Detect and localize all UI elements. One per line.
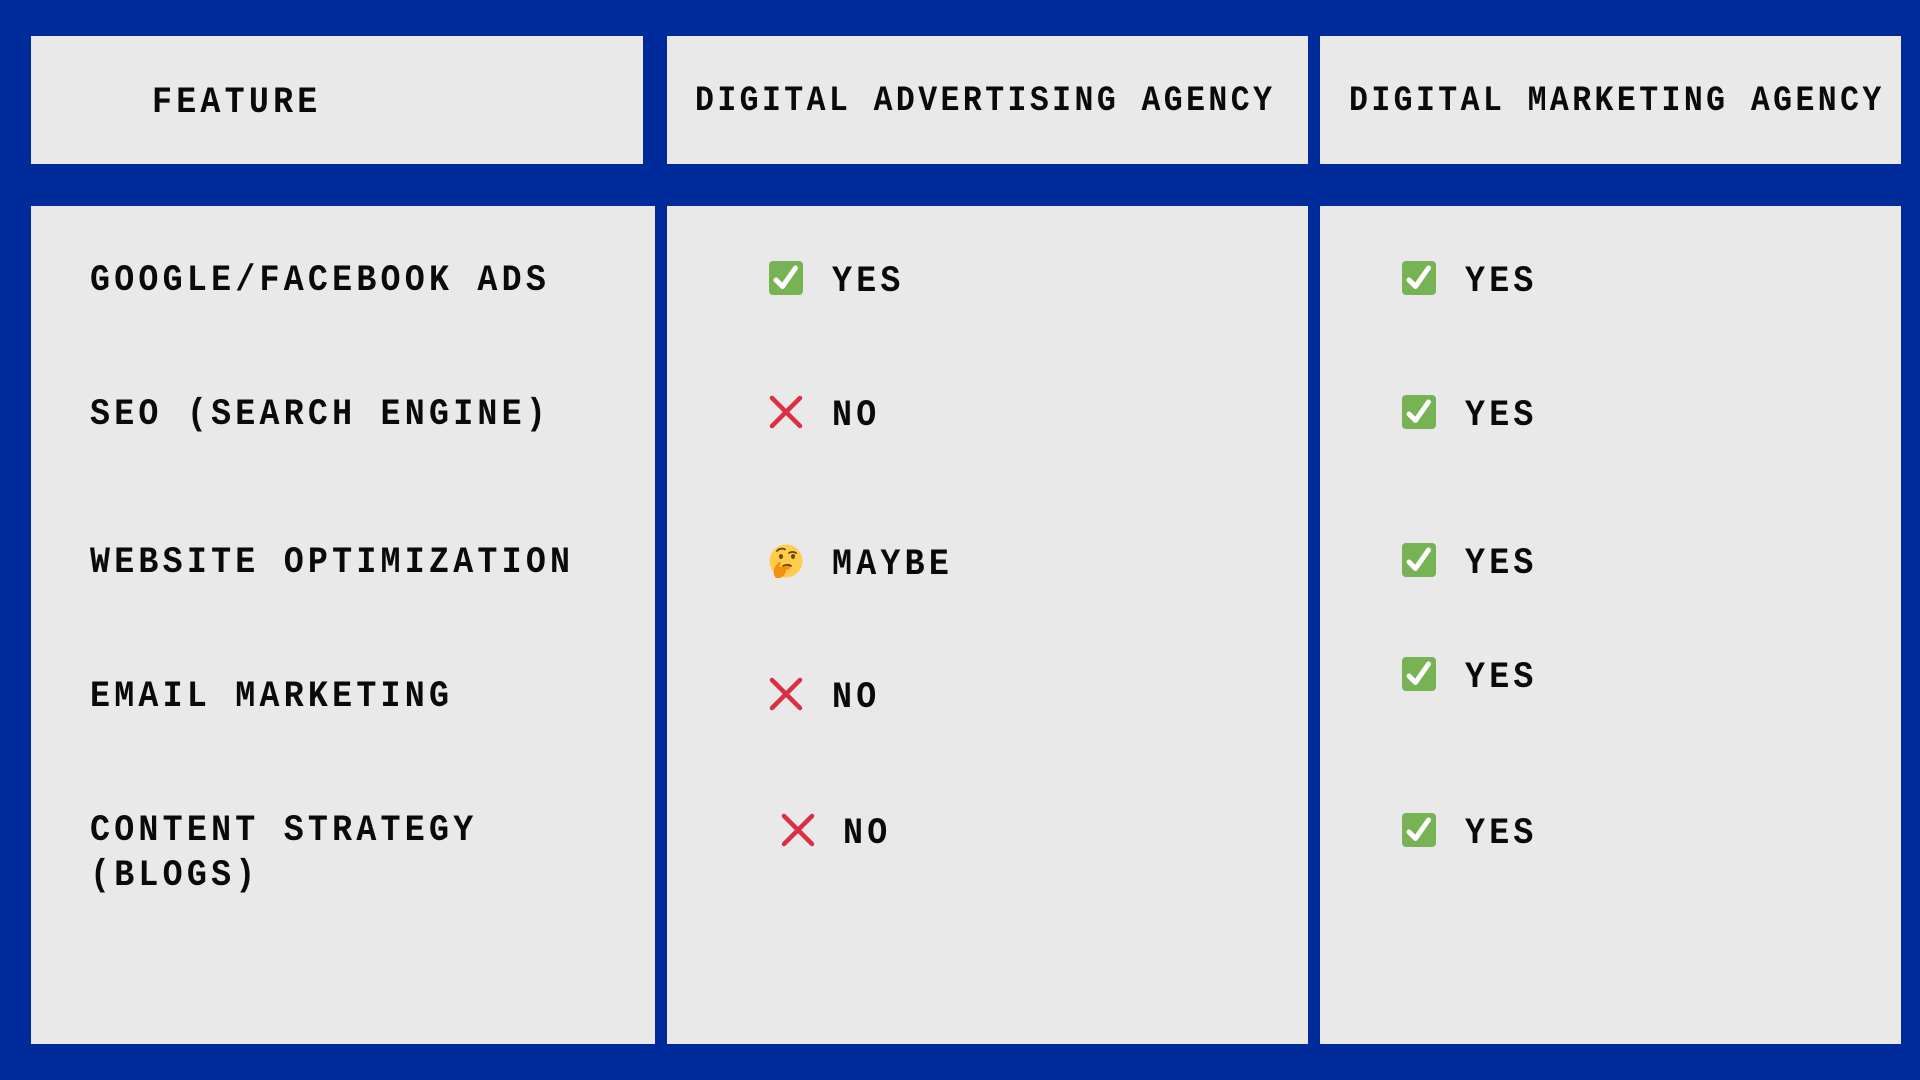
icon: thinking face (770, 544, 802, 578)
icon: green check (1402, 813, 1436, 847)
label: no: NO (832, 394, 880, 436)
row: email marketing no (770, 676, 880, 718)
label: yes: YES (1464, 260, 1537, 302)
label: no: NO (842, 812, 891, 854)
heading: feature: FEATURE (152, 82, 321, 124)
icon: green check (1402, 261, 1436, 295)
row: google/facebook ads yes (1402, 260, 1537, 302)
row: seo yes (1402, 394, 1537, 436)
icon: green check (1402, 543, 1436, 577)
label: yes: YES (1464, 394, 1537, 436)
icon: red cross (770, 678, 802, 710)
heading: digital marketing agency: DIGITAL MARKETING AGENCY (1349, 81, 1885, 121)
header panel: feature (31, 36, 643, 164)
header panel: digital marketing agency (1320, 36, 1901, 164)
feature: website optimization: WEBSITE OPTIMIZATION (90, 542, 574, 584)
feature: email marketing: EMAIL MARKETING (90, 676, 453, 718)
label: no: NO (832, 676, 880, 718)
row: google/facebook ads yes (769, 260, 904, 302)
heading: digital advertising agency: DIGITAL ADVERTISING AGENCY (695, 81, 1275, 121)
row: website optimization maybe (770, 544, 953, 586)
label: maybe: MAYBE (832, 544, 953, 586)
row: content strategy yes (1402, 812, 1537, 854)
icon: green check (769, 261, 803, 295)
feature: content strategy: CONTENT STRATEGY (BLOGS) (90, 810, 477, 896)
label: yes: YES (1464, 542, 1537, 584)
feature: google/facebook ads: GOOGLE/FACEBOOK ADS (90, 260, 550, 302)
label: yes: YES (1464, 812, 1537, 854)
feature: seo: SEO (SEARCH ENGINE) (90, 394, 550, 436)
label: yes: YES (832, 260, 904, 302)
panel: feature list (31, 206, 655, 1044)
row: website optimization yes (1402, 542, 1537, 584)
label: yes: YES (1464, 656, 1537, 698)
panel: digital advertising agency column (667, 206, 1308, 1044)
icon: red cross (770, 396, 802, 428)
panel: digital marketing agency column (1320, 206, 1901, 1044)
icon: green check (1402, 657, 1436, 691)
header panel: digital advertising agency (667, 36, 1308, 164)
row: content strategy no (782, 812, 891, 854)
row: seo no (770, 394, 880, 436)
icon: red cross (782, 814, 814, 846)
row: email marketing yes (1402, 656, 1537, 698)
icon: green check (1402, 395, 1436, 429)
